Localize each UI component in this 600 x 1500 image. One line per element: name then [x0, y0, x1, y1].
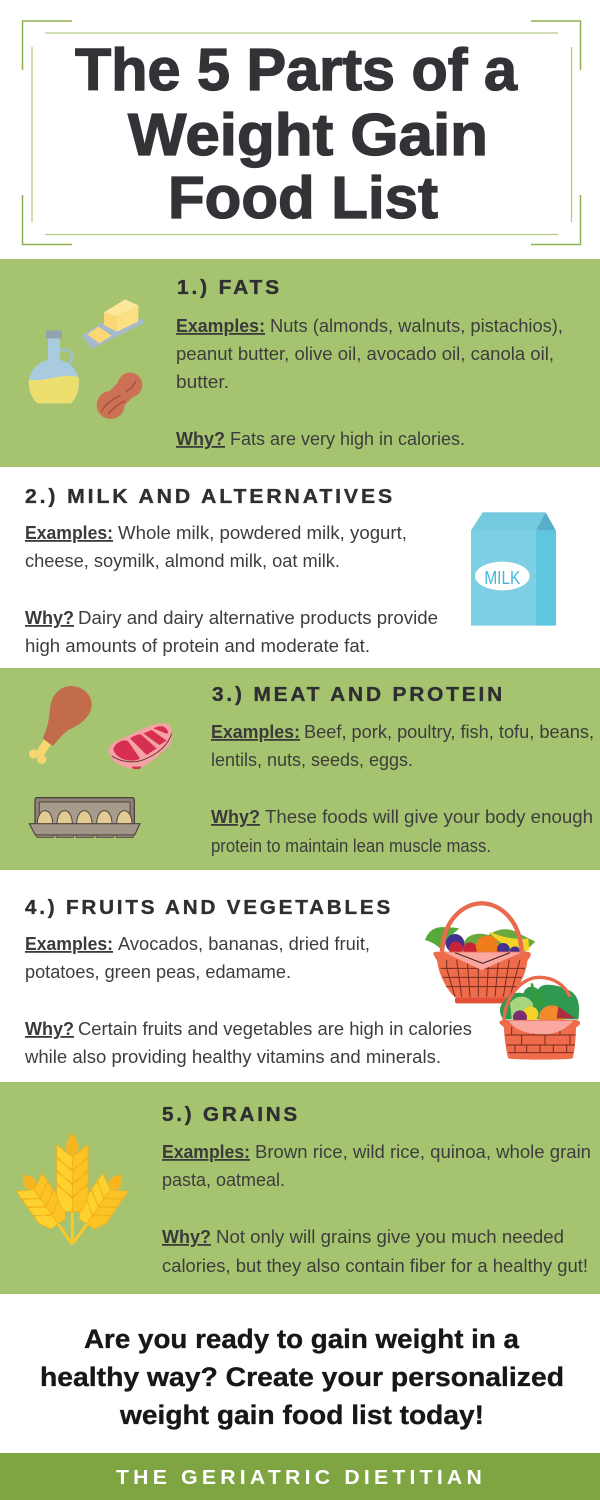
icon: wheat — [11, 1133, 134, 1244]
text: fruits description: Why? — [25, 1019, 74, 1039]
panel: grains — [0, 1082, 600, 1294]
text: fruits description: while also providing healthy vitamins and minerals. — [24, 1047, 441, 1067]
text: meat description — [211, 722, 594, 856]
title: Weight Gain — [128, 102, 488, 168]
text: fruits description: potatoes, green peas, edamame. — [25, 962, 291, 982]
text: grains description — [162, 1142, 591, 1276]
icon: milk carton: MILK — [484, 567, 521, 588]
footer bar: THE GERIATRIC DIETITIAN — [116, 1467, 486, 1489]
text: milk description: cheese, soymilk, almond milk, oat milk. — [25, 551, 340, 571]
text: fruits description — [24, 934, 472, 1067]
heading: meat and protein: 3.) MEAT AND PROTEIN — [212, 684, 505, 706]
icon: milk carton — [471, 512, 556, 626]
header: title with frame — [22, 21, 580, 244]
call to action: weight gain food list today! — [119, 1400, 484, 1430]
text: milk description: Dairy and dairy alternative products provide — [78, 608, 438, 628]
panel: meat and protein — [0, 668, 600, 870]
text: milk description: Whole milk, powdered milk, yogurt, — [118, 523, 407, 543]
text: meat description: Beef, pork, poultry, fish, tofu, beans, — [304, 722, 594, 742]
decorative corner frame — [22, 21, 580, 244]
text: grains description: calories, but they also contain fiber for a healthy gut! — [162, 1256, 588, 1276]
icon: oil, butter and peanut — [29, 299, 143, 419]
title: Food List — [168, 165, 438, 231]
heading: milk and alternatives: 2.) MILK AND ALTERNATIVES — [25, 486, 395, 508]
text: grains description: pasta, oatmeal. — [162, 1170, 285, 1190]
title: The 5 Parts of a — [75, 37, 518, 103]
text: grains description: Brown rice, wild rice, quinoa, whole grain — [255, 1142, 591, 1162]
heading: grains: 5.) GRAINS — [162, 1104, 300, 1126]
text: meat description: These foods will give your body enough — [265, 807, 593, 827]
text: grains description: Examples: — [162, 1142, 250, 1162]
text: fats description: butter. — [176, 372, 229, 392]
panel: fruits and vegetables — [24, 897, 580, 1067]
call to action: Are you ready to gain weight in a — [84, 1324, 520, 1354]
text: meat description: lentils, nuts, seeds, eggs. — [211, 750, 413, 770]
panel: milk and alternatives — [25, 486, 556, 656]
text: milk description — [25, 523, 438, 656]
text: fats description — [176, 316, 563, 449]
text: milk description: Why? — [25, 608, 74, 628]
text: fruits description: Certain fruits and vegetables are high in calories — [78, 1019, 472, 1039]
text: milk description: high amounts of protein and moderate fat. — [25, 636, 370, 656]
heading: fats: 1.) FATS — [177, 277, 282, 299]
text: meat description: Examples: — [211, 722, 300, 742]
heading: fruits and vegetables: 4.) FRUITS AND VEGETABLES — [25, 897, 393, 919]
text: fruits description: Avocados, bananas, dried fruit, — [118, 934, 370, 954]
text: fats description: Nuts (almonds, walnuts, pistachios), — [270, 316, 563, 336]
panel: fats — [0, 259, 600, 467]
text: fats description: Fats are very high in calories. — [230, 429, 465, 449]
text: fruits description: Examples: — [25, 934, 113, 954]
footer bar — [0, 1453, 600, 1500]
text: meat description: protein to maintain lean muscle mass. — [211, 836, 491, 856]
text: fats description: Why? — [176, 429, 225, 449]
text: fats description: Examples: — [176, 316, 265, 336]
call to action — [40, 1324, 564, 1430]
title — [75, 37, 518, 231]
text: milk description: Examples: — [25, 523, 113, 543]
call to action: healthy way? Create your personalized — [40, 1362, 564, 1392]
text: fats description: peanut butter, olive oil, avocado oil, canola oil, — [176, 344, 554, 364]
text: meat description: Why? — [211, 807, 260, 827]
text: grains description: Not only will grains give you much needed — [216, 1227, 564, 1247]
icon: fruit and vegetable baskets — [425, 903, 580, 1060]
text: grains description: Why? — [162, 1227, 211, 1247]
icon: drumstick, steak and eggs — [29, 686, 172, 838]
